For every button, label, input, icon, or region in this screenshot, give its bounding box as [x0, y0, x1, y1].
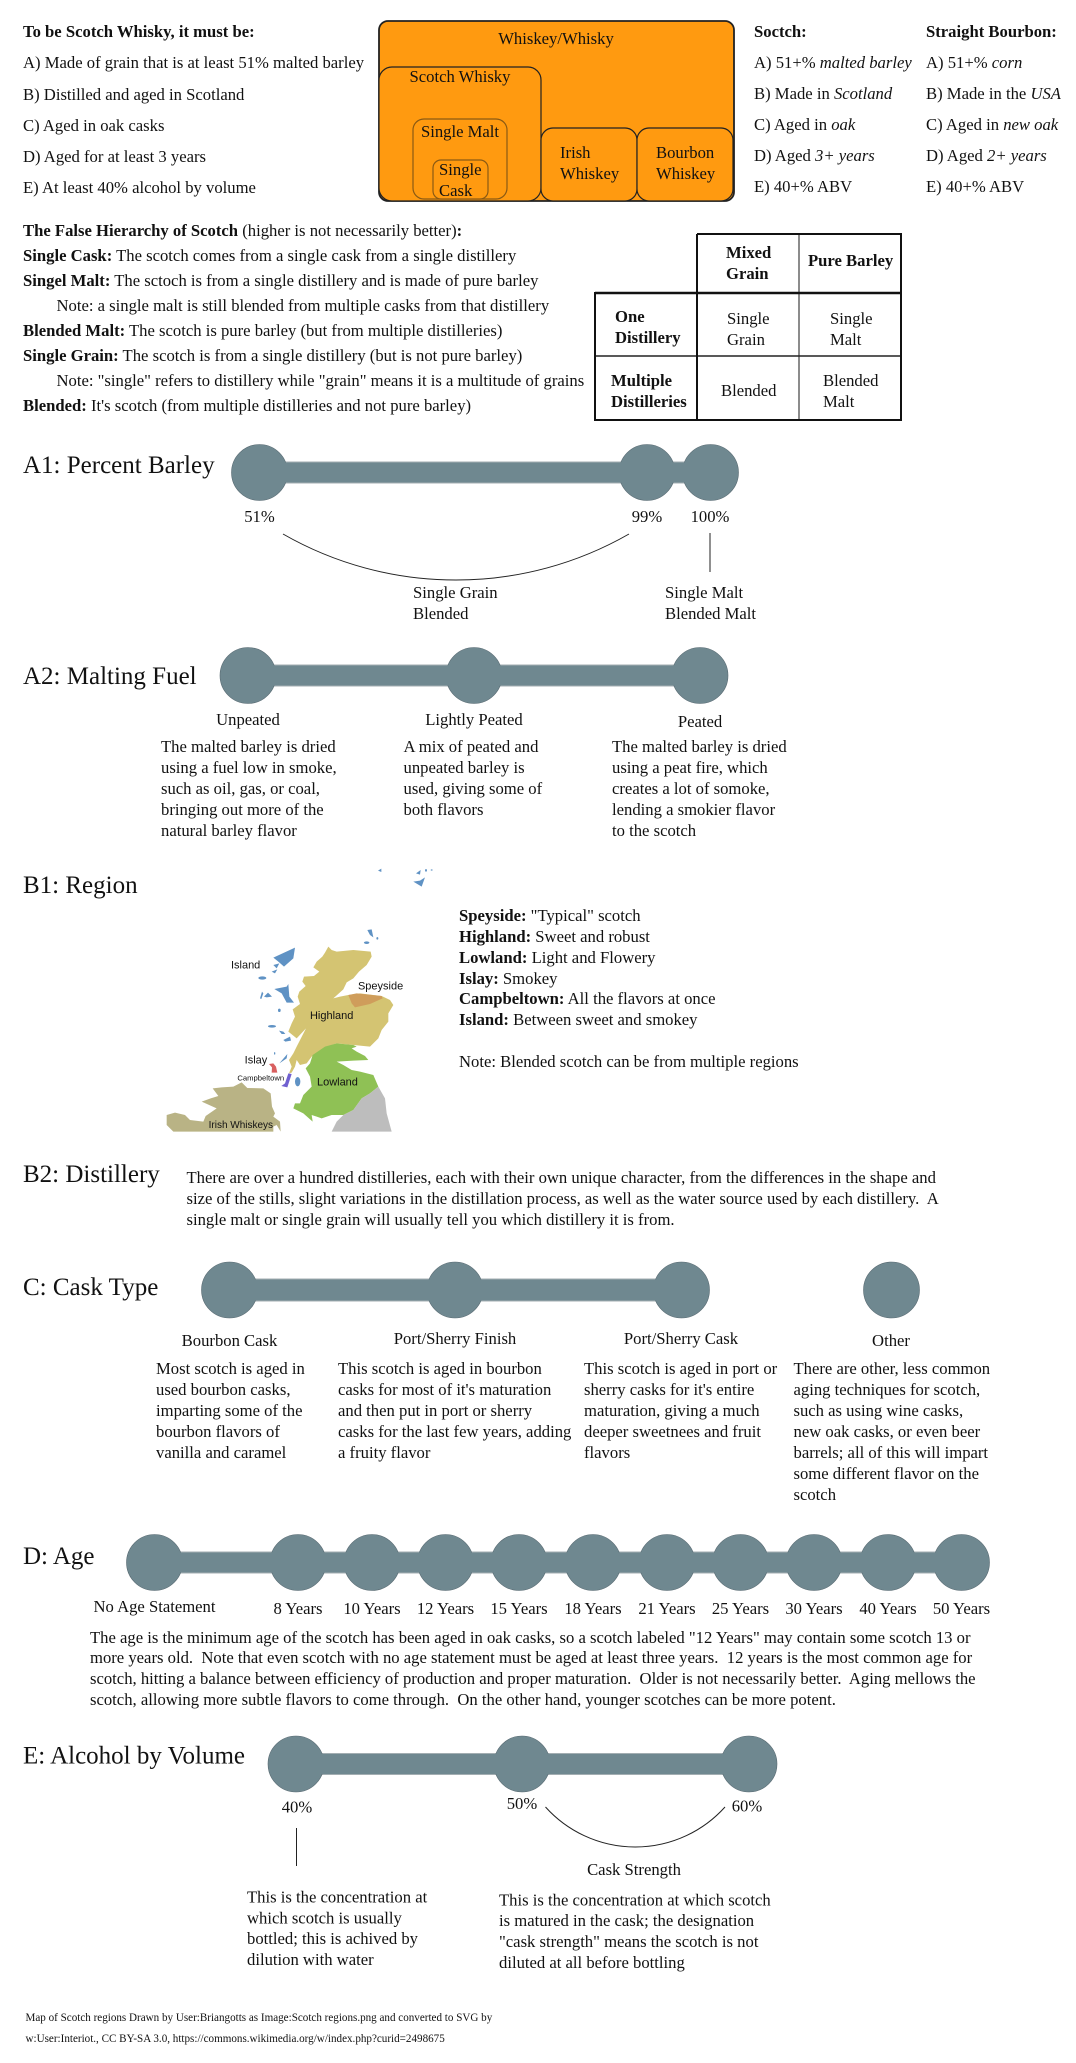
panel: scotch whisky requirements: E) At least 40% alcohol by volume [23, 178, 256, 197]
labels: percent barley values: 99% [632, 507, 662, 526]
text: port/sherry cask: flavors [584, 1443, 630, 1462]
text: 40 percent description: This is the concentration at [247, 1888, 428, 1906]
table: grain vs distillery matrix: Single [727, 309, 770, 328]
text: peated: creates a lot of somoke, [612, 779, 770, 798]
box: irish whiskey: Irish [560, 143, 591, 162]
text: other: There are other, less common [794, 1359, 991, 1378]
text: region flavors: Islay: Smokey [459, 969, 558, 988]
labels: age values: 25 Years [712, 1599, 769, 1618]
text: unpeated [161, 710, 337, 840]
map label: island: Island [231, 960, 260, 972]
text: age description: scotch, allowing more subtle flavors to come through. On the other hand, younger scotches can be more potent. [90, 1690, 836, 1709]
labels: age values: 21 Years [638, 1599, 696, 1618]
table: grain vs distillery matrix: Distillery [615, 328, 681, 347]
table: grain vs distillery matrix: Single [830, 309, 873, 328]
panel: scotch summary: B) Made in Scotland [754, 84, 893, 103]
text: region flavors [459, 906, 799, 1071]
panel: scotch summary: E) 40+% ABV [754, 177, 852, 196]
line: 100 percent marker [709, 533, 711, 572]
text: unpeated: such as oil, gas, or coal, [161, 779, 320, 798]
text: age description: more years old. Note that even scotch with no age statement must be aged at least three years. 12 years is the most common age for [90, 1648, 973, 1667]
text: unpeated: bringing out more of the [161, 800, 324, 819]
text: other: such as using wine casks, [794, 1401, 963, 1420]
table: grain vs distillery matrix: Grain [726, 264, 769, 283]
text: 40 percent description: which scotch is usually [247, 1908, 403, 1928]
labels: alcohol values: 50% [507, 1794, 537, 1813]
text: 40 percent description: bottled; this is achived by [247, 1929, 419, 1948]
text: single malt and blended malt: Blended Malt [665, 604, 756, 623]
text: lightly peated [404, 710, 543, 819]
panel: false hierarchy of scotch: Blended: It's scotch (from multiple distilleries and not pure barley) [23, 396, 471, 415]
labels: percent barley values [244, 507, 730, 526]
text: port/sherry cask: deeper sweetnees and fruit [584, 1422, 761, 1441]
panel: scotch summary: D) Aged 3+ years [754, 146, 875, 165]
text: port/sherry finish: and then put in port or sherry [338, 1401, 533, 1420]
text: lightly peated: both flavors [404, 800, 483, 819]
text: cask strength description: "cask strength" means the scotch is not [499, 1932, 759, 1951]
map: scotch regions [167, 869, 433, 1132]
panel: false hierarchy of scotch: Single Cask: The scotch comes from a single cask from a single distillery [23, 246, 517, 265]
map region: campbeltown [281, 1073, 292, 1087]
labels: age values: 12 Years [417, 1599, 474, 1618]
text: bourbon cask: vanilla and caramel [156, 1443, 287, 1462]
box: single cask: Single [439, 160, 482, 179]
text: bourbon cask: used bourbon casks, [156, 1380, 290, 1399]
text: region flavors: Highland: Sweet and robust [459, 927, 650, 946]
panel: straight bourbon summary: E) 40+% ABV [926, 177, 1024, 196]
text: region flavors: Lowland: Light and Flowery [459, 948, 656, 967]
table: grain vs distillery matrix: Blended [721, 381, 777, 400]
labels: percent barley values: 51% [244, 507, 275, 526]
text: region flavors: Island: Between sweet and smokey [459, 1010, 698, 1029]
chart: percent barley timeline [232, 444, 738, 500]
text: lightly peated: Lightly Peated [425, 710, 523, 729]
text: other [794, 1331, 991, 1504]
panel: false hierarchy of scotch: Singel Malt: The sctoch is from a single distillery and is made of pure barley [23, 271, 539, 290]
labels: percent barley values: 100% [691, 507, 730, 526]
box: scotch whisky: Scotch Whisky [410, 67, 511, 86]
map label: islay: Islay [245, 1054, 268, 1066]
panel: false hierarchy of scotch: Note: "single" refers to distillery while "grain" means it is a multitude of grains [56, 371, 584, 390]
panel: scotch summary: Soctch: [754, 22, 807, 41]
box: single malt: Single Malt [421, 122, 499, 141]
panel: scotch whisky requirements: D) Aged for at least 3 years [23, 147, 206, 166]
labels: age values: 18 Years [564, 1599, 622, 1618]
box: scotch whisky [379, 67, 541, 201]
labels: alcohol values: 60% [732, 1796, 762, 1816]
map region: ireland [167, 1082, 281, 1132]
text: single malt and blended malt [665, 583, 756, 623]
labels: age values: 40 Years [859, 1599, 917, 1618]
table: grain vs distillery matrix: Mixed [726, 243, 772, 262]
heading: A1 percent barley: A1: Percent Barley [23, 452, 215, 479]
text: unpeated: natural barley flavor [161, 821, 297, 840]
box: bourbon whiskey [637, 128, 733, 201]
map label: campbeltown: Campbeltown [237, 1074, 284, 1083]
text: region flavors: Campbeltown: All the flavors at once [459, 989, 716, 1008]
box: whiskey/whisky: Whiskey/Whisky [498, 29, 614, 48]
text: other: scotch [794, 1485, 837, 1504]
text: other: some different flavor on the [794, 1464, 979, 1483]
text: 40 percent description: dilution with water [247, 1950, 374, 1969]
text: distillery description [186, 1168, 939, 1229]
text: cask strength description: This is the concentration at which scotch [499, 1890, 771, 1910]
text: other: barrels; all of this will impart [794, 1443, 988, 1462]
box: bourbon whiskey: Whiskey [656, 164, 716, 183]
text: region flavors: Note: Blended scotch can be from multiple regions [459, 1052, 799, 1071]
text: other: new oak casks, or even beer [794, 1422, 981, 1441]
panel: straight bourbon summary: C) Aged in new oak [926, 115, 1059, 134]
map label: highland: Highland [310, 1010, 353, 1022]
labels: age values: 50 Years [933, 1599, 990, 1618]
text: map credit: w:User:Interiot., CC BY-SA 3.0, https://commons.wikimedia.org/w/index.php?curid=2498675 [26, 2033, 445, 2045]
text: bourbon cask: bourbon flavors of [156, 1422, 280, 1441]
labels: age values: 15 Years [490, 1599, 548, 1618]
text: 40 percent description [247, 1888, 428, 1969]
table: grain vs distillery matrix: Blended [823, 371, 879, 390]
text: age description: The age is the minimum age of the scotch has been aged in oak casks, so a scotch labeled "12 Years" may contain some scotch 13 or [90, 1628, 971, 1647]
panel: false hierarchy of scotch: The False Hierarchy of Scotch (higher is not necessarily better): [23, 221, 462, 240]
panel: false hierarchy of scotch: Blended Malt: The scotch is pure barley (but from multiple distilleries) [23, 321, 502, 340]
heading: B1 region: B1: Region [23, 872, 138, 899]
text: port/sherry finish: casks for most of it's maturation [338, 1380, 552, 1399]
text: bourbon cask [156, 1331, 306, 1462]
text: peated: The malted barley is dried [612, 737, 787, 756]
labels: age values: 30 Years [785, 1599, 843, 1618]
text: port/sherry cask [584, 1329, 778, 1462]
panel: straight bourbon summary: A) 51+% corn [926, 53, 1022, 72]
labels: age values: 10 Years [343, 1599, 401, 1618]
text: map credit: Map of Scotch regions Drawn by User:Briangotts as Image:Scotch regions.png and converted to SVG by [26, 2012, 493, 2024]
map region: islay [269, 1063, 277, 1073]
panel: scotch whisky requirements: B) Distilled and aged in Scotland [23, 85, 245, 104]
text: lightly peated: A mix of peated and [404, 737, 539, 756]
text: bourbon cask: imparting some of the [156, 1401, 302, 1420]
table: grain vs distillery matrix: Malt [830, 330, 862, 349]
panel: scotch summary: A) 51+% malted barley [754, 53, 912, 72]
map region: speyside [348, 993, 383, 1007]
text: unpeated: using a fuel low in smoke, [161, 758, 337, 777]
chart: age timeline [126, 1534, 990, 1590]
labels: age values: No Age Statement [93, 1597, 216, 1616]
line: 40 percent marker [296, 1828, 298, 1866]
text: port/sherry finish [338, 1329, 571, 1462]
heading: B2 distillery: B2: Distillery [23, 1161, 160, 1188]
panel: straight bourbon summary: Straight Bourbon: [926, 22, 1057, 41]
table: grain vs distillery matrix: Grain [727, 330, 766, 349]
panel: straight bourbon summary: D) Aged 2+ years [926, 146, 1047, 165]
map label: irish whiskeys: Irish Whiskeys [209, 1120, 273, 1131]
map region: highland [288, 947, 393, 1073]
text: other: Other [872, 1331, 910, 1350]
text: cask strength description: diluted at all before bottling [499, 1953, 685, 1972]
labels: age values [93, 1597, 990, 1618]
text: peated: using a peat fire, which [612, 758, 768, 777]
diagram: whisky family nested boxes [379, 21, 734, 201]
text: port/sherry cask: sherry casks for it's entire [584, 1380, 754, 1399]
text: port/sherry finish: casks for the last few years, adding [338, 1422, 571, 1441]
chart: malting fuel timeline [220, 648, 728, 704]
map region: islands [258, 869, 433, 1086]
table: grain vs distillery matrix: Pure Barley [808, 251, 894, 270]
text: single malt and blended malt: Single Malt [665, 583, 743, 602]
box: single malt [413, 119, 507, 199]
box: irish whiskey [541, 128, 637, 201]
panel: false hierarchy of scotch: Single Grain: The scotch is from a single distillery (but is not pure barley) [23, 346, 522, 365]
text: cask strength description [499, 1890, 771, 1972]
panel: straight bourbon summary: B) Made in the USA [926, 84, 1062, 103]
text: port/sherry cask: maturation, giving a much [584, 1401, 760, 1420]
text: port/sherry cask: Port/Sherry Cask [624, 1329, 739, 1348]
text: region flavors: Speyside: "Typical" scotch [459, 906, 641, 925]
text: port/sherry cask: This scotch is aged in port or [584, 1359, 778, 1378]
panel: false hierarchy of scotch: Note: a single malt is still blended from multiple casks from that distillery [56, 296, 550, 315]
text: peated [612, 712, 787, 840]
text: age description [90, 1628, 976, 1709]
text: unpeated: Unpeated [216, 710, 281, 729]
text: lightly peated: used, giving some of [404, 779, 543, 798]
labels: alcohol values [282, 1794, 762, 1816]
table: grain vs distillery matrix: One [615, 307, 645, 326]
labels: alcohol values: 40% [282, 1798, 312, 1816]
heading: D age: D: Age [23, 1543, 95, 1570]
text: single grain and blended: Blended [413, 604, 469, 623]
table: grain vs distillery matrix: Multiple [611, 371, 672, 390]
heading: requirements: To be Scotch Whisky, it must be: [23, 22, 255, 41]
text: other: aging techniques for scotch, [794, 1380, 980, 1399]
text: distillery description: size of the stills, slight variations in the distillation process, as well as the water source used by each distillery. A [186, 1189, 939, 1208]
map label: speyside: Speyside [358, 980, 403, 992]
text: single grain and blended [413, 583, 498, 623]
map label: lowland: Lowland [317, 1076, 358, 1088]
map region: northern england [332, 1087, 392, 1132]
panel: scotch whisky requirements [23, 22, 365, 197]
text: cask strength description: is matured in the cask; the designation [499, 1911, 755, 1930]
arc: 51 to 99 percent bracket [283, 534, 629, 580]
box: whiskey/whisky [379, 21, 734, 201]
text: lightly peated: unpeated barley is [404, 758, 525, 777]
text: peated: lending a smokier flavor [612, 800, 776, 819]
text: single grain and blended: Single Grain [413, 583, 498, 602]
labels: age values: 8 Years [273, 1599, 323, 1618]
table: grain vs distillery matrix: Malt [823, 392, 855, 411]
text: port/sherry finish: Port/Sherry Finish [394, 1329, 517, 1348]
table: grain vs distillery matrix [595, 234, 901, 420]
panel: scotch summary [754, 22, 912, 196]
table: grain vs distillery matrix: Distilleries [611, 392, 687, 411]
text: unpeated: The malted barley is dried [161, 737, 336, 756]
text: bourbon cask: Bourbon Cask [182, 1331, 278, 1350]
text: age description: scotch, hitting a balance between efficiency of production and proper maturation. Older is not necessarily better. Aging mellows the [90, 1669, 976, 1688]
heading: E alcohol by volume: E: Alcohol by Volume [23, 1742, 245, 1770]
panel: scotch whisky requirements: A) Made of grain that is at least 51% malted barley [23, 53, 365, 72]
chart: alcohol by volume timeline [268, 1736, 777, 1792]
box: bourbon whiskey: Bourbon [656, 143, 715, 162]
text: port/sherry finish: a fruity flavor [338, 1443, 431, 1462]
arc: 50 to 60 percent bracket [546, 1807, 725, 1847]
map region: lowland [293, 1043, 378, 1122]
panel: scotch whisky requirements: C) Aged in oak casks [23, 116, 164, 135]
panel: false hierarchy of scotch [23, 221, 584, 415]
heading: C cask type: C: Cask Type [23, 1274, 158, 1301]
heading: A2 malting fuel: A2: Malting Fuel [23, 663, 197, 690]
panel: straight bourbon summary [926, 22, 1062, 196]
text: bourbon cask: Most scotch is aged in [156, 1359, 306, 1378]
box: single cask: Cask [439, 181, 473, 200]
box: irish whiskey: Whiskey [560, 164, 620, 183]
chart: other cask dot [864, 1262, 920, 1318]
box: single cask [433, 160, 488, 200]
text: peated: Peated [678, 712, 723, 731]
text: distillery description: single malt or single grain will usually tell you which distillery it is from. [186, 1210, 675, 1229]
chart: cask type timeline [202, 1262, 710, 1318]
text: cask strength label: Cask Strength [587, 1860, 682, 1879]
text: peated: to the scotch [612, 821, 697, 840]
panel: scotch summary: C) Aged in oak [754, 115, 856, 134]
text: map credit [26, 2012, 493, 2045]
text: port/sherry finish: This scotch is aged in bourbon [338, 1359, 542, 1378]
text: distillery description: There are over a hundred distilleries, each with their own unique character, from the differences in the shape and [186, 1168, 937, 1187]
